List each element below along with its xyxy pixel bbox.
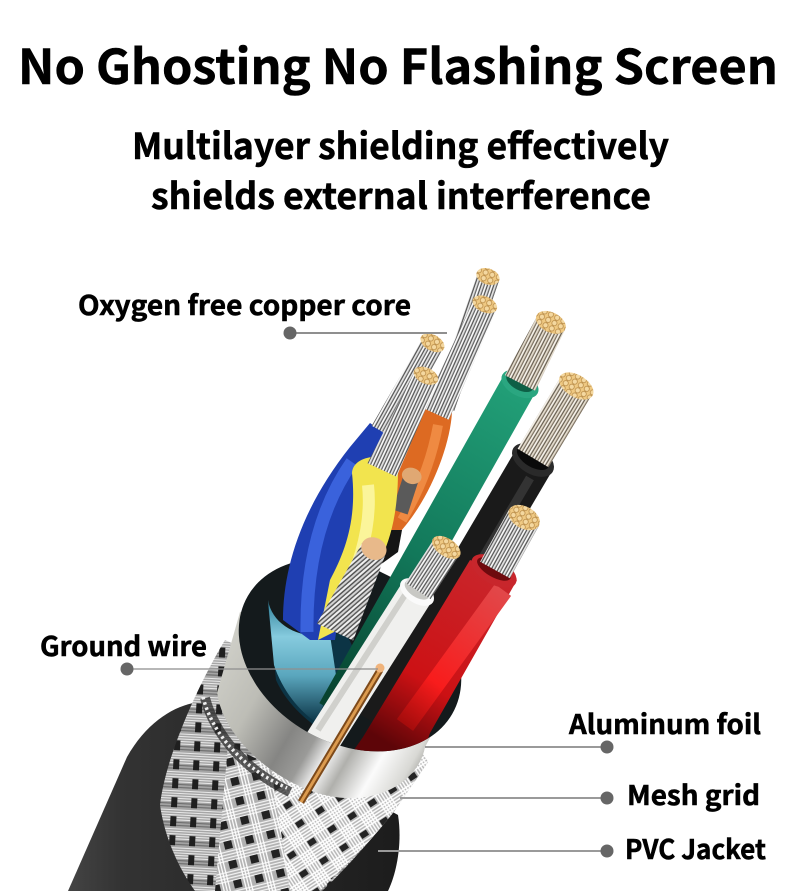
aluminum foil shield: [217, 600, 460, 798]
cyan foil sleeve: [268, 600, 336, 722]
blue wire core: [372, 334, 444, 432]
subtitle: [132, 118, 669, 220]
label: PVC jacket: PVC Jacket: [625, 828, 766, 867]
red wire core: [480, 504, 540, 578]
orange wire core: [423, 291, 501, 420]
leader: ground wire: [120, 662, 378, 676]
green wire: [335, 364, 543, 712]
mesh grid braid: [160, 640, 428, 891]
subtitle: shields external interference: [151, 168, 651, 220]
label: ground wire: Ground wire: [40, 625, 207, 664]
twisted strand core: [317, 537, 387, 640]
inner wires: [268, 265, 598, 790]
dark wire between yellow and orange: [382, 530, 402, 564]
orange wire: [391, 409, 452, 530]
white wire: [318, 572, 439, 748]
foil opening: [204, 520, 496, 790]
PVC jacket: [68, 703, 400, 891]
leader: oxygen free copper core: [284, 326, 447, 340]
small copper end behind yellow: [395, 468, 422, 514]
inner dark teal wrap: [268, 606, 352, 724]
black wire core: [518, 372, 594, 468]
yellow wire: [318, 457, 398, 640]
leader: mesh grid: [400, 792, 614, 804]
black wire: [428, 444, 554, 616]
white wire core: [406, 536, 461, 599]
red wire: [354, 554, 517, 752]
yellow wire core: [368, 366, 438, 477]
cable illustration: [68, 265, 598, 891]
label: aluminum foil: Aluminum foil: [568, 703, 761, 742]
blue wire: [283, 423, 388, 640]
label: oxygen free copper core: Oxygen free copper core: [78, 284, 411, 323]
leader: aluminum foil: [425, 740, 614, 754]
label: mesh grid: Mesh grid: [627, 774, 760, 813]
title: No Ghosting No Flashing Screen: [18, 28, 778, 98]
leader: PVC jacket: [378, 844, 614, 858]
ground wire: [301, 664, 384, 802]
rear silver core: [453, 268, 500, 411]
subtitle: Multilayer shielding effectively: [132, 118, 669, 170]
green wire core: [504, 310, 566, 391]
